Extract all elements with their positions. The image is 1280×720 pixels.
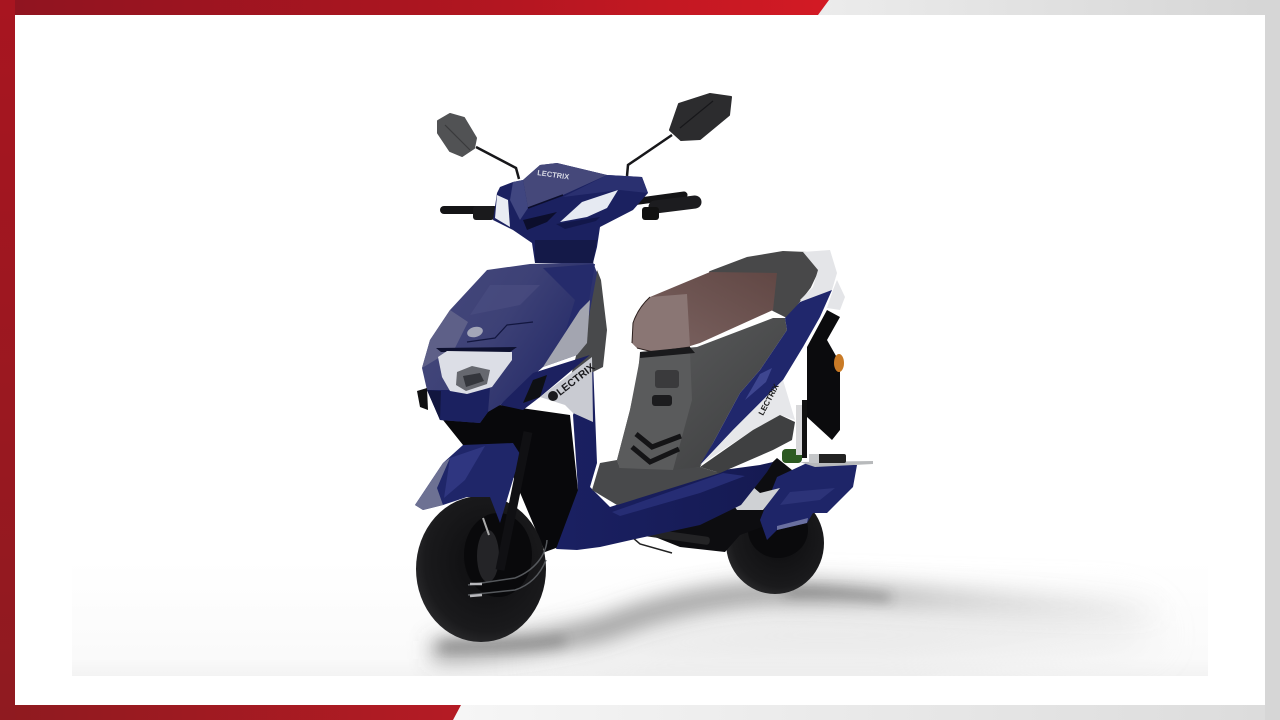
seat dark rear — [710, 252, 818, 317]
right LED lamp — [560, 190, 618, 222]
rear wheel — [726, 492, 824, 594]
rear fender — [760, 463, 857, 540]
front emblem — [466, 325, 484, 339]
panel brand label: LECTRIX — [554, 361, 597, 398]
USB port — [652, 395, 672, 406]
white side decal — [700, 380, 795, 465]
rear carrier plate and spring — [782, 400, 873, 467]
left mirror — [438, 114, 476, 156]
white tail covers — [800, 250, 845, 310]
rear mudflap — [807, 310, 840, 440]
brow slit — [436, 347, 517, 352]
under-frame mechanics — [632, 458, 792, 553]
headlight nose — [427, 388, 490, 423]
vent slats — [632, 434, 681, 462]
front side grey column — [570, 270, 607, 380]
seat brown cushion — [632, 272, 777, 352]
front white brand panel — [540, 357, 597, 422]
headlight — [438, 351, 512, 394]
front shield — [417, 262, 597, 423]
windshield brand label: LECTRIX — [537, 168, 570, 181]
handlebar grips — [444, 195, 695, 220]
rear indicator — [834, 354, 844, 372]
seat shadow underside — [640, 347, 695, 358]
shield grey strip with dots — [543, 300, 590, 367]
front fork — [500, 432, 528, 570]
blue floor frame — [556, 362, 773, 550]
left headlamp strip — [495, 195, 510, 227]
decal brand label: LECTRIX — [757, 382, 781, 417]
white suspension arm — [730, 487, 780, 510]
disc brake cables — [468, 540, 547, 595]
shield crease — [467, 322, 533, 342]
mirror stems — [476, 135, 672, 179]
front leg shield dark — [443, 405, 578, 552]
lower grey panel — [700, 415, 795, 473]
right mirror — [670, 94, 731, 140]
rear grey body — [617, 318, 787, 470]
front fender — [415, 443, 522, 523]
handlebar cowl — [493, 163, 648, 263]
floor panel — [592, 460, 720, 505]
floor shading and shadow — [72, 560, 1208, 676]
front wheel — [416, 496, 547, 642]
rear blue side panel — [700, 290, 832, 465]
scooter — [415, 94, 873, 642]
storage pocket — [655, 370, 679, 388]
dark inner wedge and blue wrap — [500, 355, 590, 410]
